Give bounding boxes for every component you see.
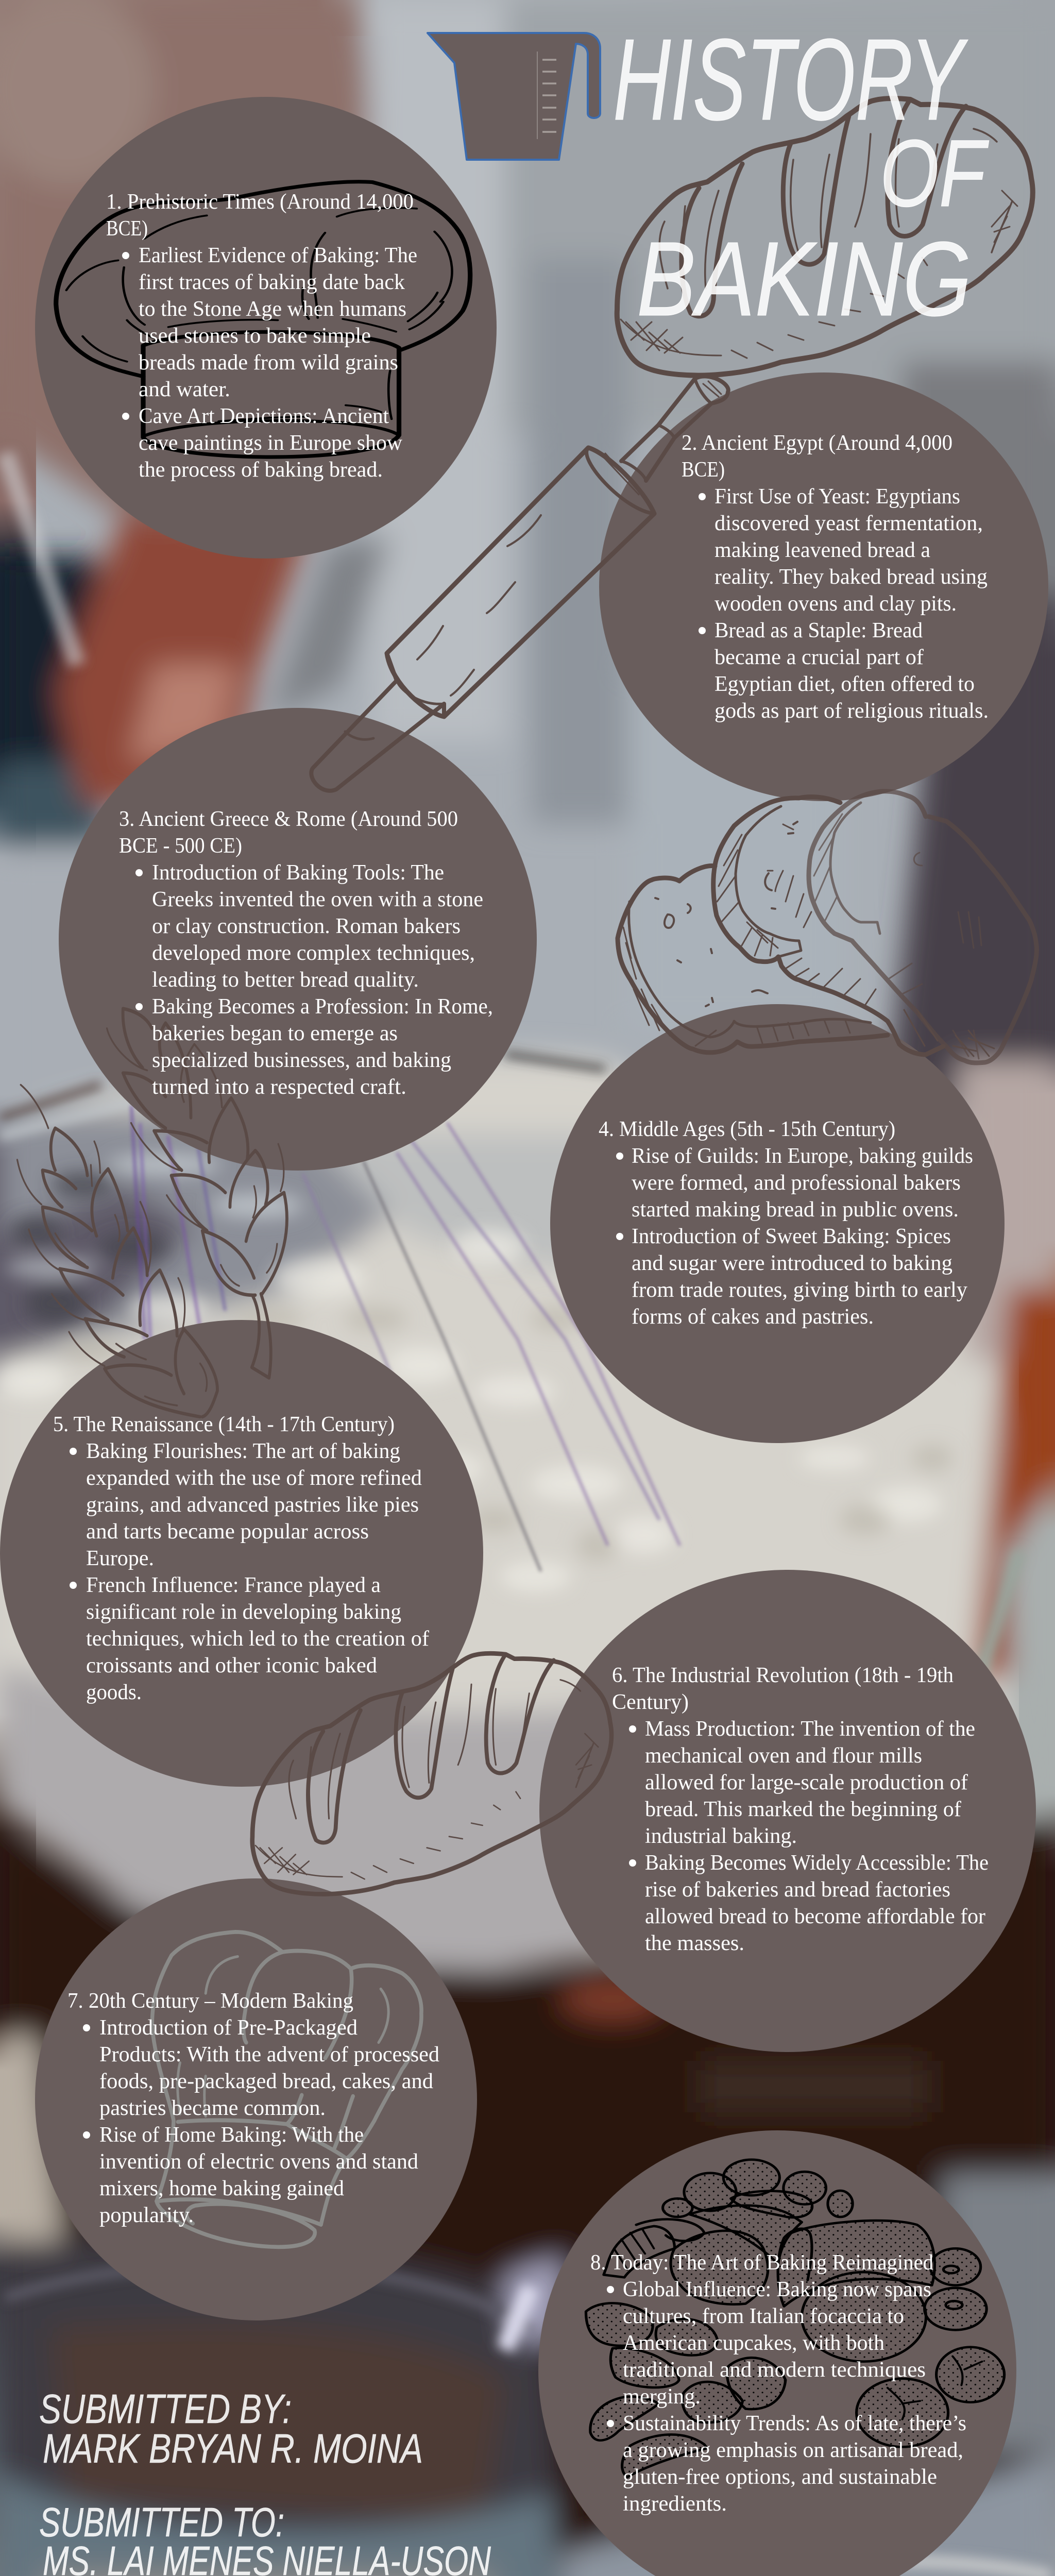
title: OF — [880, 121, 989, 227]
bullet: cave art — [122, 404, 403, 482]
heading — [612, 1664, 954, 1714]
bullet: mass production: bread. This marked the beginning of — [645, 1798, 961, 1821]
text block 3: greece and rome — [119, 807, 493, 1099]
bullet: home baking: mixers, home baking gained — [99, 2177, 344, 2200]
bullet: baking tools: or clay construction. Roman bakers — [152, 914, 461, 938]
icon: bread loaf top — [617, 98, 1033, 376]
bullet: mass production: allowed for large-scale production of — [645, 1771, 968, 1794]
heading: 1. Prehistoric Times (Around 14,000 — [106, 190, 414, 214]
title — [613, 14, 989, 338]
text block 1: prehistoric times — [106, 190, 417, 482]
bullet: earliest evidence: first traces of baking date back — [139, 270, 405, 294]
bullet: staple: gods as part of religious rituals. — [714, 699, 989, 723]
bullet: flourishes — [70, 1439, 422, 1570]
bullet: flourishes: Baking Flourishes: The art of baking — [86, 1439, 400, 1463]
bullet: earliest evidence: Earliest Evidence of Baking: The — [139, 244, 417, 267]
bullet: baking tools: Greeks invented the oven with a stone — [152, 888, 483, 911]
bullet: mass production — [629, 1717, 975, 1848]
bullet: sustainability: Sustainability Trends: As of late, there’s — [623, 2412, 966, 2435]
bullet: sustainability: a growing emphasis on artisanal bread, — [623, 2438, 963, 2462]
icon: bread slices — [618, 791, 1037, 1063]
heading: BCE) — [682, 458, 725, 482]
bullet: staple: became a crucial part of — [714, 646, 924, 669]
icon: bread loaf lower — [252, 1653, 611, 1894]
bullet: sweet baking — [616, 1225, 967, 1329]
bullet: home baking — [83, 2123, 418, 2227]
bullet: global influence: merging. — [623, 2385, 701, 2409]
bullet: guilds: Rise of Guilds: In Europe, baking guilds — [632, 1144, 973, 1168]
heading — [682, 431, 952, 482]
bullet: pre-packaged: pastries became common. — [99, 2096, 326, 2120]
bullet: profession: Baking Becomes a Profession: In Rome, — [152, 995, 493, 1019]
heading: 8. Today: The Art of Baking Reimagined — [590, 2251, 933, 2275]
bullet: home baking: popularity. — [99, 2204, 194, 2227]
bullet: french influence: significant role in developing baking — [86, 1600, 401, 1624]
panel 1 oval — [35, 97, 497, 558]
panel 8 oval — [538, 2130, 1016, 2576]
bullet: global influence: cultures, from Italian focaccia to — [623, 2304, 904, 2328]
text block 5: renaissance — [53, 1413, 429, 1704]
heading: Century) — [612, 1690, 689, 1714]
bullet: french influence: goods. — [86, 1681, 142, 1704]
bullet: sweet baking: and sugar were introduced to baking — [632, 1251, 952, 1275]
bullet: home baking: invention of electric ovens and stand — [99, 2150, 418, 2174]
heading — [106, 190, 414, 241]
bullet: profession: specialized businesses, and baking — [152, 1048, 451, 1072]
bullet: flourishes: Europe. — [86, 1547, 154, 1570]
bullet: yeast: making leavened bread a — [714, 538, 930, 562]
bullet: earliest evidence: breads made from wild grains — [139, 351, 398, 375]
bullet: staple: Bread as a Staple: Bread — [714, 619, 923, 642]
bullet: earliest evidence: to the Stone Age when humans — [139, 297, 406, 321]
icon: rolling pin — [311, 376, 728, 791]
bullet: accessible — [629, 1851, 989, 1955]
bullet: earliest evidence: used stones to bake simple — [139, 324, 371, 348]
bullet: earliest evidence: and water. — [139, 378, 230, 401]
text block 4: middle ages — [599, 1117, 973, 1329]
panel 5 oval — [0, 1320, 483, 1787]
icon: chef hat black — [56, 182, 470, 457]
bullet: flourishes: and tarts became popular across — [86, 1520, 369, 1544]
text block 2: ancient egypt — [682, 431, 989, 723]
bullet: accessible: the masses. — [645, 1931, 744, 1955]
icon: wheat branches — [17, 1009, 287, 1417]
bullet: french influence: French Influence: France played a — [86, 1573, 381, 1597]
bullet: global influence: traditional and modern techniques — [623, 2358, 926, 2382]
panel 6 oval — [539, 1570, 1036, 2052]
heading: 7. 20th Century – Modern Baking — [67, 1989, 353, 2013]
bullet: cave art: the process of baking bread. — [139, 458, 383, 482]
bullet: yeast — [699, 485, 988, 616]
panel 4 oval — [550, 1004, 1005, 1443]
text block 8: today — [590, 2251, 966, 2516]
bullet: global influence: American cupcakes, with both — [623, 2331, 884, 2355]
submitted by / submitted to credits: SUBMITTED TO: — [39, 2499, 284, 2545]
bullet: staple — [699, 619, 989, 723]
submitted by / submitted to credits: SUBMITTED BY: — [39, 2386, 292, 2432]
bullet: accessible: Baking Becomes Widely Accessible: The — [645, 1851, 989, 1875]
heading: 6. The Industrial Revolution (18th - 19th — [612, 1664, 954, 1687]
panel 2 oval — [599, 372, 1048, 801]
bullet: global influence: Global Influence: Baking now spans — [623, 2278, 931, 2301]
submitted by / submitted to credits: MARK BRYAN R. MOINA — [43, 2426, 423, 2471]
bullet: sweet baking: from trade routes, giving birth to early — [632, 1278, 967, 1302]
submitted by / submitted to credits — [39, 2386, 491, 2576]
bullet: staple: Egyptian diet, often offered to — [714, 672, 975, 696]
icon: measuring cup — [428, 33, 600, 160]
bullet: pre-packaged: foods, pre-packaged bread, cakes, and — [99, 2070, 433, 2093]
heading: 4. Middle Ages (5th - 15th Century) — [599, 1117, 895, 1141]
bullet: baking tools — [135, 861, 483, 992]
bullet: sustainability: gluten-free options, and sustainable — [623, 2465, 937, 2489]
bullet: guilds: started making bread in public ovens. — [632, 1198, 959, 1222]
bullet: baking tools: developed more complex techniques, — [152, 941, 475, 965]
bullet: mass production: mechanical oven and flour mills — [645, 1744, 922, 1768]
bullet: accessible: rise of bakeries and bread factories — [645, 1878, 950, 1902]
icon: chef hat grey — [152, 1932, 421, 2247]
title: BAKING — [637, 220, 972, 338]
text block 6: industrial revolution — [612, 1664, 989, 1955]
heading — [119, 807, 458, 858]
heading: BCE) — [106, 217, 148, 241]
bullet: home baking: Rise of Home Baking: With the — [99, 2123, 364, 2147]
bullet: mass production: industrial baking. — [645, 1824, 797, 1848]
bullet: guilds: were formed, and professional bakers — [632, 1171, 961, 1195]
panel 3 oval — [59, 708, 537, 1171]
bullet: pre-packaged: Introduction of Pre-Packaged — [99, 2016, 358, 2040]
bullet: mass production: Mass Production: The invention of the — [645, 1717, 975, 1741]
heading: BCE - 500 CE) — [119, 834, 242, 858]
bullet: profession: turned into a respected craft. — [152, 1075, 406, 1099]
bullet: baking tools: leading to better bread quality. — [152, 968, 419, 992]
bullet: french influence: techniques, which led to the creation of — [86, 1627, 429, 1651]
text block 7: modern baking — [67, 1989, 439, 2227]
bullet: sustainability: ingredients. — [623, 2492, 727, 2516]
bullet: yeast: First Use of Yeast: Egyptians — [714, 485, 960, 509]
bullet: earliest evidence — [122, 244, 417, 401]
heading: 2. Ancient Egypt (Around 4,000 — [682, 431, 952, 455]
bullet: accessible: allowed bread to become affordable for — [645, 1905, 985, 1928]
bullet: pre-packaged — [83, 2016, 439, 2120]
heading: 3. Ancient Greece & Rome (Around 500 — [119, 807, 458, 831]
heading: 5. The Renaissance (14th - 17th Century) — [53, 1413, 395, 1436]
bullet: pre-packaged: Products: With the advent of processed — [99, 2043, 439, 2066]
panel 7 oval — [35, 1878, 477, 2320]
bullet: cave art: Cave Art Depictions: Ancient — [139, 404, 389, 428]
bullet: profession: bakeries began to emerge as — [152, 1022, 398, 1045]
bullet: french influence: croissants and other iconic baked — [86, 1654, 377, 1677]
bullet: flourishes: expanded with the use of more refined — [86, 1466, 422, 1490]
bullet: french influence — [70, 1573, 429, 1704]
bullet: cave art: cave paintings in Europe show — [139, 431, 403, 455]
bullet: global influence — [607, 2278, 931, 2409]
bullet: yeast: reality. They baked bread using — [714, 565, 988, 589]
bullet: sweet baking: Introduction of Sweet Baking: Spices — [632, 1225, 951, 1248]
bullet: profession — [135, 995, 493, 1099]
bullet: sustainability — [607, 2412, 966, 2516]
bullet: baking tools: Introduction of Baking Tools: The — [152, 861, 444, 885]
icon: pile of pastries — [586, 2160, 1005, 2477]
bullet: guilds — [616, 1144, 973, 1222]
bullet: yeast: discovered yeast fermentation, — [714, 512, 983, 535]
bullet: flourishes: grains, and advanced pastries like pies — [86, 1493, 419, 1517]
bullet: sweet baking: forms of cakes and pastries. — [632, 1305, 874, 1329]
bullet: yeast: wooden ovens and clay pits. — [714, 592, 957, 616]
